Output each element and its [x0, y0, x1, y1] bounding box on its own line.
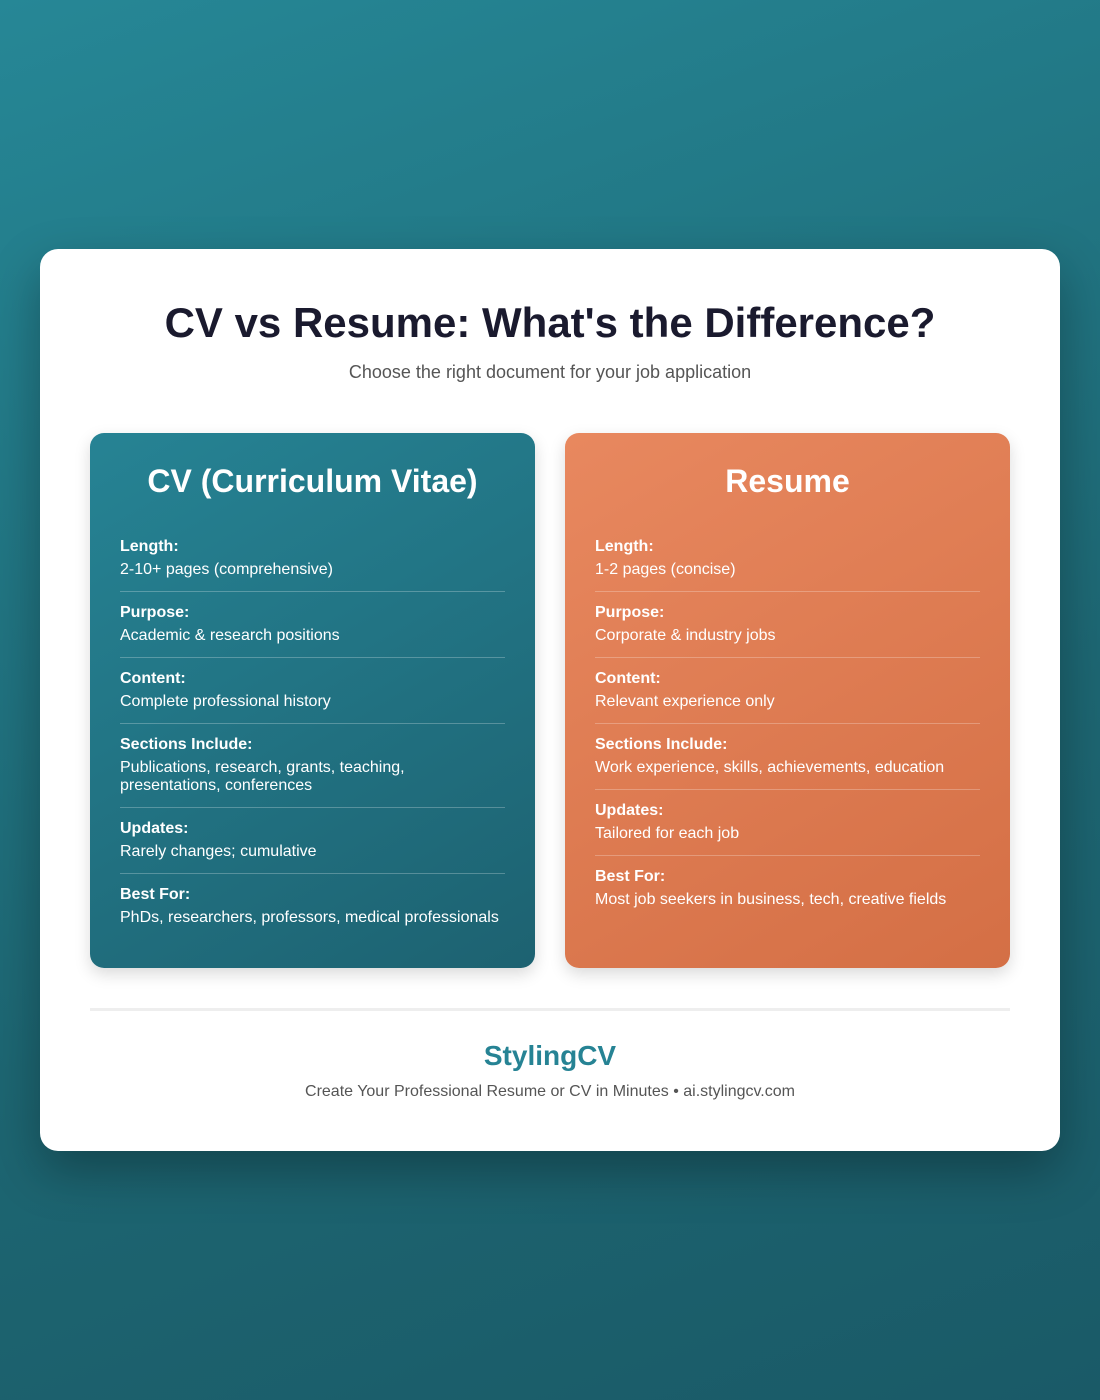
brand: StylingCV	[484, 1040, 616, 1071]
footer text: Create Your Professional Resume or CV in Minutes • ai.stylingcv.com	[305, 1083, 795, 1100]
cv rows: Updates:	[120, 820, 188, 837]
panel: resume	[565, 433, 1010, 968]
cv rows	[120, 538, 505, 926]
resume rows: Sections Include:	[595, 736, 727, 753]
resume rows: Corporate & industry jobs	[595, 627, 776, 644]
cv rows: PhDs, researchers, professors, medical professionals	[120, 909, 499, 926]
cv rows: Publications, research, grants, teaching, presentations, conferences	[120, 759, 405, 794]
resume rows: Best For:	[595, 868, 665, 885]
subtitle: Choose the right document for your job application	[349, 362, 751, 382]
cv heading: CV (Curriculum Vitae)	[147, 463, 478, 499]
cv rows: Complete professional history	[120, 693, 331, 710]
cv rows: Academic & research positions	[120, 627, 340, 644]
resume rows	[595, 538, 980, 908]
resume rows: Work experience, skills, achievements, education	[595, 759, 944, 776]
card	[40, 249, 1060, 1151]
cv rows: Rarely changes; cumulative	[120, 843, 317, 860]
cv rows: Sections Include:	[120, 736, 252, 753]
panel: cv	[90, 433, 535, 968]
cv rows: Content:	[120, 670, 186, 687]
resume rows: Most job seekers in business, tech, creative fields	[595, 891, 946, 908]
cv rows: Length:	[120, 538, 179, 555]
cv rows: Best For:	[120, 886, 190, 903]
resume rows: 1-2 pages (concise)	[595, 561, 736, 578]
resume rows: Content:	[595, 670, 661, 687]
resume heading: Resume	[725, 463, 850, 499]
resume rows: Length:	[595, 538, 654, 555]
cv rows: Purpose:	[120, 604, 189, 621]
resume rows: Tailored for each job	[595, 825, 739, 842]
resume rows: Purpose:	[595, 604, 664, 621]
resume rows: Relevant experience only	[595, 693, 775, 710]
resume rows: Updates:	[595, 802, 663, 819]
cv rows: 2-10+ pages (comprehensive)	[120, 561, 333, 578]
title: CV vs Resume: What's the Difference?	[165, 299, 935, 346]
